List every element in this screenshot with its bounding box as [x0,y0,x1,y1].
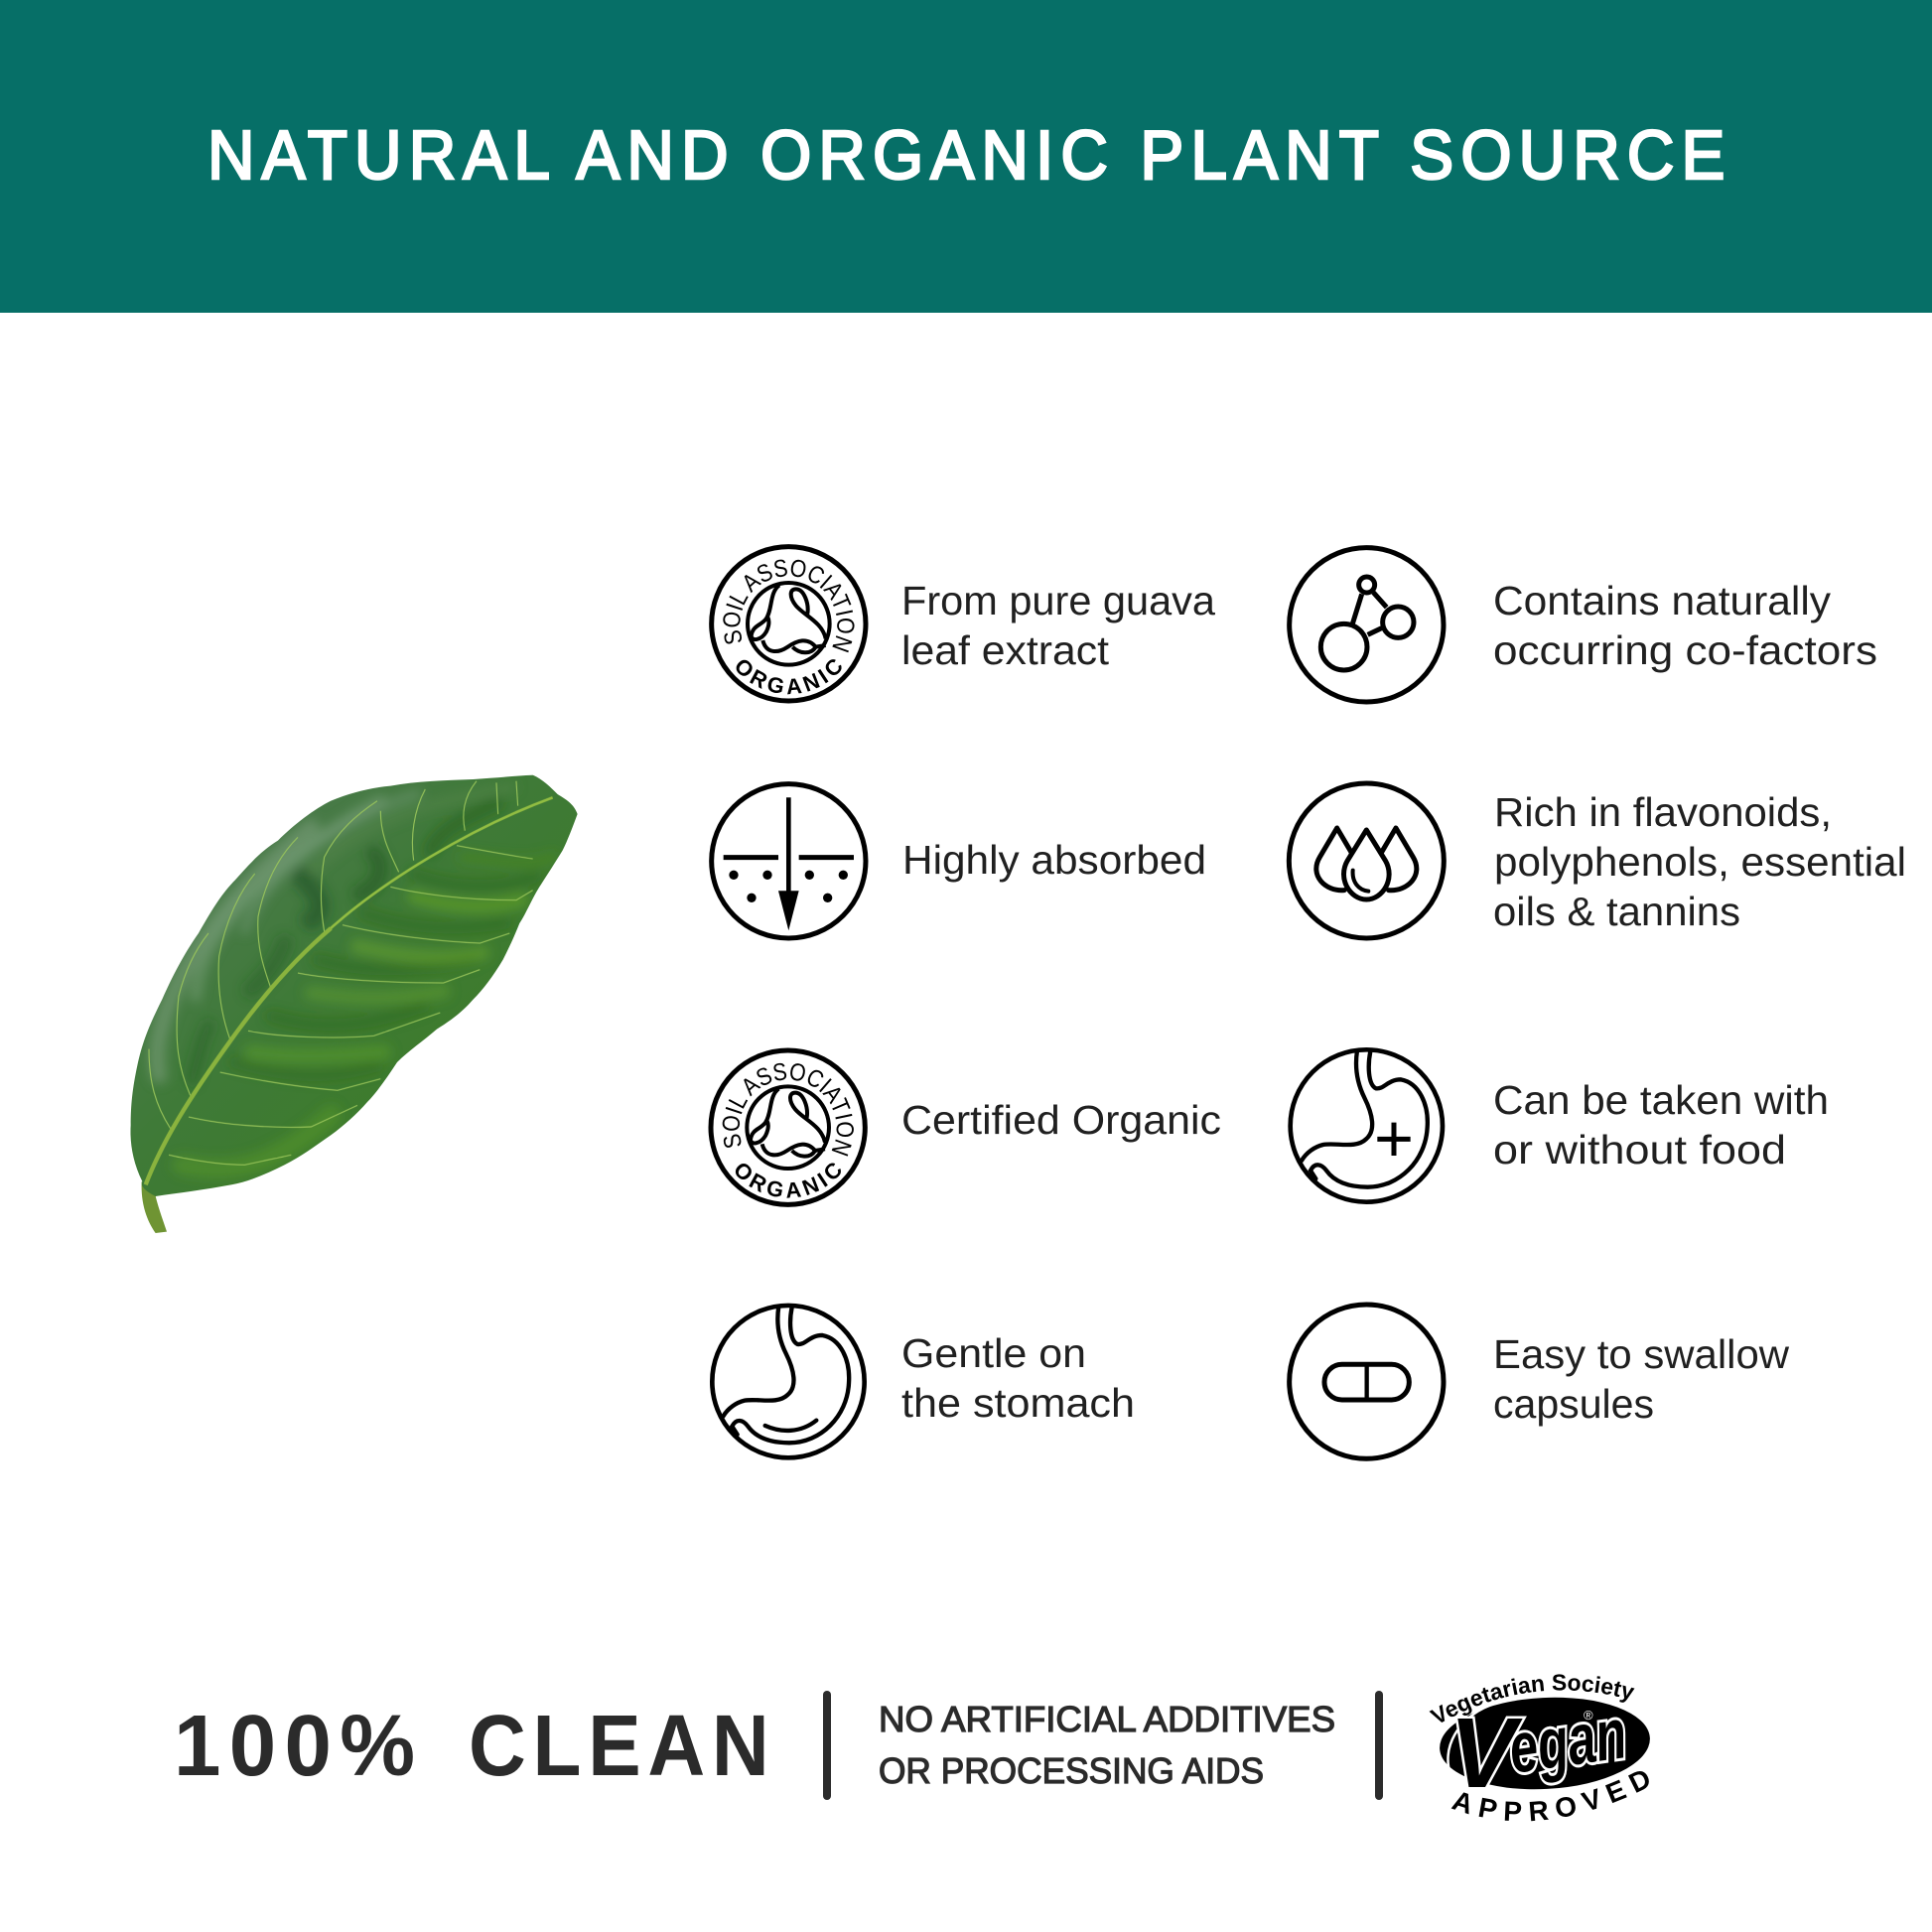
icon: capsule [1290,1305,1444,1458]
logo: vegetarian society vegan approved: APPROVED [1451,1771,1649,1821]
item: rich in flavonoids [1289,783,1906,938]
footer: 100% clean: CLEAN [469,1697,769,1794]
midrib [330,796,553,929]
icon: stomach with plus [1291,1049,1443,1202]
icon: molecule [1290,548,1444,702]
text: contains naturally occurring co-factors: Contains naturally [1493,578,1832,623]
icon: soil association organic: ORGANIC [737,659,842,695]
icon: soil association organic badge: SOIL ASSOCIATION [723,1062,854,1157]
text: gentle on the stomach: Gentle on [901,1330,1086,1376]
text: from pure guava leaf extract [901,578,1215,673]
text: rich in flavonoids, polyphenols, essential oils and tannins: oils & tannins [1493,889,1740,934]
text: gentle on the stomach: the stomach [901,1380,1135,1426]
item: easy to swallow capsules [1290,1305,1789,1458]
text: rich in flavonoids, polyphenols, essential oils and tannins [1493,789,1906,934]
text: can be taken with or without food [1493,1077,1829,1173]
icon: soil association organic [709,544,868,703]
text: highly absorbed: Highly absorbed [902,837,1206,883]
icon: absorption arrow [712,784,866,938]
item: certified organic [709,1048,1221,1207]
header band [0,0,1932,313]
logo: vegetarian society vegan approved: egan [1504,1694,1631,1789]
text: rich in flavonoids, polyphenols, essential oils and tannins: Rich in flavonoids, [1494,789,1832,835]
icon: three drops [1289,783,1444,938]
item: highly absorbed [712,784,1206,938]
text: gentle on the stomach [901,1330,1135,1426]
text: from pure guava leaf extract: leaf extract [901,627,1110,673]
text: certified organic: Certified Organic [901,1097,1221,1143]
text: easy to swallow capsules [1493,1331,1789,1427]
logo: vegetarian society vegan approved [1430,1674,1650,1821]
divider bar left [823,1691,831,1800]
item: gentle on the stomach [712,1306,1135,1457]
text: can be taken with or without food: Can be taken with [1493,1077,1829,1123]
leaf stem [142,1181,167,1233]
panel: benefits grid [709,544,1906,1461]
footer: no artificial additives: OR PROCESSING AIDS [879,1750,1264,1791]
side veins [149,781,533,1165]
logo: vegetarian society vegan approved: Vegetarian Society [1430,1674,1634,1723]
divider bar right [1375,1691,1383,1800]
shading [157,787,553,1169]
icon: soil association organic badge [709,1048,868,1207]
text: easy to swallow capsules: capsules [1493,1381,1654,1427]
footer: no artificial additives: NO ARTIFICIAL ADDITIVES [879,1699,1335,1739]
title: NATURAL AND ORGANIC PLANT SOURCE [207,117,1725,194]
icon: soil association organic: SOIL ASSOCIATION [723,560,855,653]
logo: vegetarian society vegan approved: ® [1584,1708,1593,1723]
icon: soil association organic badge: ORGANIC [735,1164,841,1198]
item: from pure guava leaf extract [709,544,1215,703]
text: from pure guava leaf extract: From pure guava [901,578,1215,623]
text: can be taken with or without food: or without food [1493,1127,1786,1173]
leaf blade [119,764,589,1208]
text: easy to swallow capsules: Easy to swallow [1493,1331,1789,1377]
logo: vegetarian society vegan approved: V [1449,1698,1523,1809]
item: contains naturally occurring co-factors [1290,548,1877,702]
text: rich in flavonoids, polyphenols, essential oils and tannins: polyphenols, essential [1494,839,1906,885]
leaf photo illustration [119,764,589,1233]
footer: 100% clean [174,1697,769,1794]
text: contains naturally occurring co-factors [1493,578,1877,673]
icon: stomach [712,1306,865,1457]
text: contains naturally occurring co-factors: occurring co-factors [1493,627,1877,673]
footer: no artificial additives [879,1699,1335,1791]
footer: 100% clean: 100% [174,1698,415,1794]
item: can be taken with or without food [1291,1049,1829,1202]
